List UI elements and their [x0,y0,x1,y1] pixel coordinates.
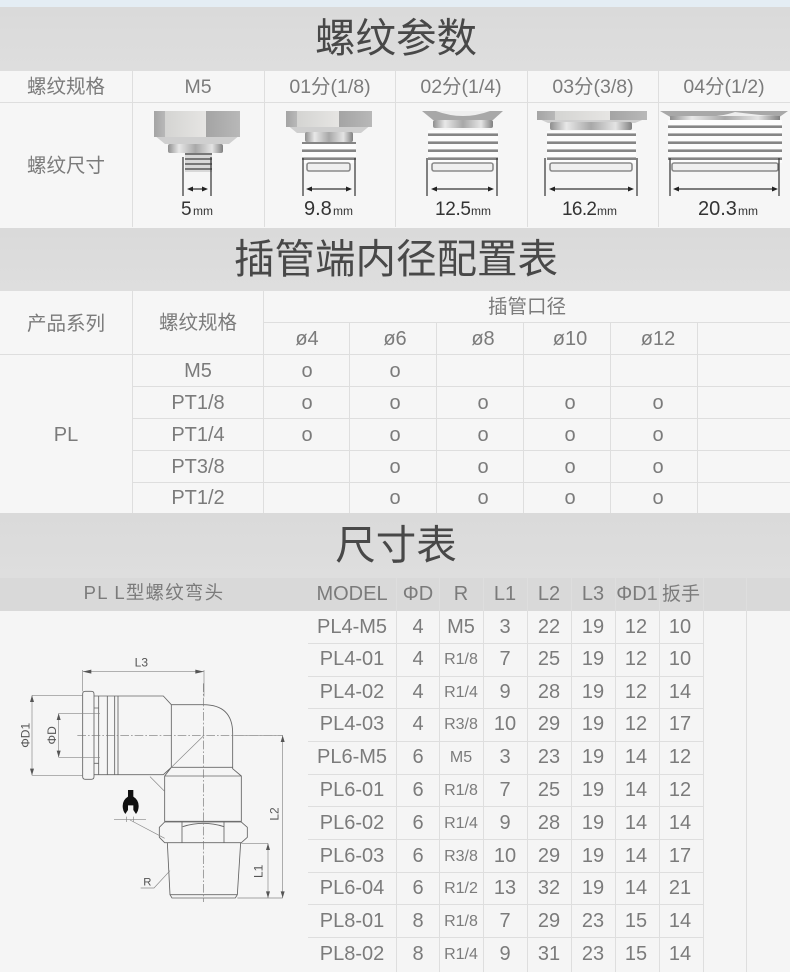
row: PL6-04: 32 [538,877,560,899]
column headers: ΦD1 [616,583,658,605]
icon: M5 fitting: mm [193,204,213,218]
row: PL4-02: R1/4 [444,684,478,701]
row: PL4-02: 14 [669,681,691,703]
row: PL8-01: 29 [538,910,560,932]
left header: PL L-type threaded elbow: PL L型螺纹弯头 [84,582,224,603]
row: M5: o [301,360,313,382]
row: M5 [184,360,401,382]
row label: thread size: 螺纹尺寸 [27,155,105,177]
row: PL4-01: 7 [499,648,511,670]
row: PL6-01: 12 [669,779,691,801]
row: PL8-02: 15 [625,943,647,965]
row: PL4-01: R1/8 [444,651,478,668]
column headers: 扳手 [662,583,700,605]
row: PL4-M5: 22 [538,616,560,638]
row: PL6-03: 17 [669,845,691,867]
column headers: MODEL [316,583,388,605]
row: PT3/8: o [564,456,576,478]
row: PL6-03: 10 [494,845,516,867]
thread spec header row: 01分(1/8) [289,76,371,98]
row: PT1/4: o [564,424,576,446]
technical drawing: PL elbow fitting: L2 [268,807,282,821]
row: PT1/4: o [389,424,401,446]
table header: ø8 [471,328,495,350]
column headers: L3 [582,583,604,605]
thread spec header row [27,76,765,98]
icon: 3/8 fitting: 16.2 [562,199,597,220]
row: PL6-02: 14 [625,812,647,834]
row: PT3/8: o [477,456,489,478]
row: PT1/2: o [389,487,401,509]
row: PL4-01: 4 [412,648,424,670]
thread spec header row: 04分(1/2) [683,76,765,98]
row: PL6-01: R1/8 [444,782,478,799]
table header [27,296,675,350]
row: PL6-02: PL6-02 [320,812,384,834]
row: PL4-02: 12 [625,681,647,703]
row: PL4-03: 19 [582,713,604,735]
column headers: ΦD [403,583,433,605]
row: PL4-M5: M5 [447,616,475,638]
title: thread parameters: 螺纹参数 [315,15,477,61]
row: PL8-01: PL8-01 [320,910,384,932]
table header: 产品系列 [27,313,105,335]
row: PT1/2: o [652,487,664,509]
row: PL4-02 [320,681,691,703]
row: PL6-01: 14 [625,779,647,801]
table header: 螺纹规格 [159,312,237,334]
row: PL4-M5: PL4-M5 [317,616,387,638]
row: PL4-M5 [317,616,691,638]
row: PL6-01: 6 [412,779,424,801]
row: PL8-01: 15 [625,910,647,932]
row: PL4-01: 12 [625,648,647,670]
row: PL4-03: 17 [669,713,691,735]
table header: ø10 [553,328,587,350]
row: PL8-02: 31 [538,943,560,965]
row: PL4-03: PL4-03 [320,713,384,735]
row: PL4-M5: 3 [499,616,511,638]
column headers: R [454,583,468,605]
row: PL6-02: R1/4 [444,815,478,832]
row: PL4-03: 10 [494,713,516,735]
dimension arrowheads [30,670,285,898]
icon: 1/2 fitting: 20.3 [698,198,737,220]
row: PT1/8: o [389,392,401,414]
center lines [77,683,283,902]
row: PL8-02: R1/4 [444,946,478,963]
technical drawing: PL elbow fitting: ΦD1 [18,723,32,748]
row: PL6-M5: 6 [412,746,424,768]
row: PL6-02: 28 [538,812,560,834]
technical drawing: PL elbow fitting: L1 [252,864,266,878]
column headers: L1 [494,583,516,605]
row: PL6-M5: 23 [538,746,560,768]
technical drawing: PL elbow fitting [18,656,285,902]
row: M5: M5 [184,360,212,382]
table header: ø6 [383,328,407,350]
icon: 1/4 fitting: 12.5 [435,199,471,220]
row: PL6-02: 14 [669,812,691,834]
row: PL6-04: 21 [669,877,691,899]
panel: tube bore table [0,291,790,513]
row: PL8-01 [320,910,691,932]
icon: 1/8 fitting [286,111,372,220]
panel: dimension table [0,578,790,972]
row: PT1/8: PT1/8 [171,392,225,414]
row: PL6-01: 7 [499,779,511,801]
product series label: PL [54,424,78,446]
row: PT1/8: o [477,392,489,414]
row: PL6-04: 6 [412,877,424,899]
row: PL4-02: 28 [538,681,560,703]
icon: 1/4 fitting: mm [471,204,491,218]
section band: thread parameters [0,7,790,70]
row: PL4-M5: 4 [412,616,424,638]
row: PL8-01: 8 [412,910,424,932]
row: PL4-03: R3/8 [444,716,478,733]
row: PL4-M5: 19 [582,616,604,638]
row: PT1/4: PT1/4 [171,424,225,446]
section band: tube bore configuration [0,228,790,291]
column headers: L2 [538,583,560,605]
title: dimension table: 尺寸表 [335,522,457,568]
thread spec header row: 02分(1/4) [420,76,502,98]
row: PL4-01: 10 [669,648,691,670]
row: PT1/4 [171,424,664,446]
row: PL8-02 [320,943,691,965]
hex nut and threaded end [159,822,247,898]
technical drawing: PL elbow fitting: ΦD [45,726,59,744]
dimension labels: L3 [135,656,148,670]
row: PT1/4: o [301,424,313,446]
extension and dimension lines [32,670,283,898]
row: PL6-01: 25 [538,779,560,801]
row: PL6-04: PL6-04 [320,877,384,899]
row: PL6-03: 14 [625,845,647,867]
row: PL6-02 [320,812,691,834]
row: PL6-02: 19 [582,812,604,834]
row: PL6-04: 19 [582,877,604,899]
row: PL4-03 [320,713,691,735]
row: PT3/8: PT3/8 [171,456,225,478]
row: PL6-04 [320,877,691,899]
row: PL8-02: PL8-02 [320,943,384,965]
row: M5: o [389,360,401,382]
row: PL6-04: 13 [494,877,516,899]
thread spec header row: 03分(3/8) [552,76,634,98]
row: PT3/8 [171,456,664,478]
row: PT1/2: o [477,487,489,509]
row: PT1/8: o [564,392,576,414]
row: PL6-03: R3/8 [444,848,478,865]
table header: ø4 [295,328,319,350]
row: PL6-04: 14 [625,877,647,899]
row: PL8-02: 8 [412,943,424,965]
row: PT1/8: o [652,392,664,414]
panel: thread parameter table [0,70,790,228]
table header: ø12 [641,328,675,350]
thread spec header row: 螺纹规格 [27,76,105,98]
row: PL4-01: PL4-01 [320,648,384,670]
row: PL8-02: 9 [499,943,511,965]
icon: 1/2 fitting [660,111,788,220]
row: PL6-03: 19 [582,845,604,867]
icon: 1/4 fitting [422,111,503,220]
row: PL6-03: 6 [412,845,424,867]
icon: M5 fitting [154,111,240,220]
icon: M5 fitting: 5 [181,199,192,220]
table header: 插管口径 [488,296,566,318]
row: PL8-01: 14 [669,910,691,932]
title: tube bore configuration: 插管端内径配置表 [234,236,558,282]
row: PL8-01: R1/8 [444,913,478,930]
icon: 3/8 fitting [537,111,647,220]
row: PL6-M5: 14 [625,746,647,768]
row: PL6-03 [320,845,691,867]
technical drawing: PL elbow fitting: R [143,877,151,889]
row: PL8-01: 7 [499,910,511,932]
row: PL4-01 [320,648,691,670]
row: PL6-01: 19 [582,779,604,801]
row: PT1/8 [171,392,664,414]
icon: 1/2 fitting: mm [738,204,758,218]
row: PL6-02: 9 [499,812,511,834]
row: PL4-01: 25 [538,648,560,670]
icon: 1/8 fitting: mm [333,204,353,218]
row: PL6-01 [320,779,691,801]
row: PL4-02: 4 [412,681,424,703]
row: PL6-M5: PL6-M5 [317,746,387,768]
row: PL8-02: 23 [582,943,604,965]
icon: wrench [114,790,146,822]
top strip [0,0,790,7]
leader lines [130,735,204,888]
row: PL6-M5: M5 [450,749,472,766]
row: PL8-02: 14 [669,943,691,965]
icon: 1/8 fitting: 9.8 [304,198,332,220]
row: PT1/4: o [477,424,489,446]
row: PT1/2: o [564,487,576,509]
row: PL4-03: 12 [625,713,647,735]
column headers [316,583,700,605]
row: PT1/8: o [301,392,313,414]
row: PL6-M5: 12 [669,746,691,768]
row: PT3/8: o [389,456,401,478]
row: PL6-01: PL6-01 [320,779,384,801]
row: PL6-M5: 3 [499,746,511,768]
row: PL6-03: PL6-03 [320,845,384,867]
section band: dimension table [0,513,790,578]
row: PL4-M5: 12 [625,616,647,638]
icon: 3/8 fitting: mm [597,204,617,218]
row: PT3/8: o [652,456,664,478]
row: PL4-M5: 10 [669,616,691,638]
row: PT1/2: PT1/2 [171,487,225,509]
fitting outline [83,691,241,821]
row: PL6-04: R1/2 [444,880,478,897]
row: PL4-03: 4 [412,713,424,735]
row: PT1/2 [171,487,664,509]
row: PT1/4: o [652,424,664,446]
row: PL4-03: 29 [538,713,560,735]
row: PL4-02: 9 [499,681,511,703]
row: PL6-02: 6 [412,812,424,834]
row: PL4-02: PL4-02 [320,681,384,703]
row: PL6-M5 [317,746,691,768]
thread spec header row: M5 [184,76,212,98]
row: PL6-M5: 19 [582,746,604,768]
row: PL8-01: 23 [582,910,604,932]
row: PL4-02: 19 [582,681,604,703]
row: PL4-01: 19 [582,648,604,670]
row: PL6-03: 29 [538,845,560,867]
